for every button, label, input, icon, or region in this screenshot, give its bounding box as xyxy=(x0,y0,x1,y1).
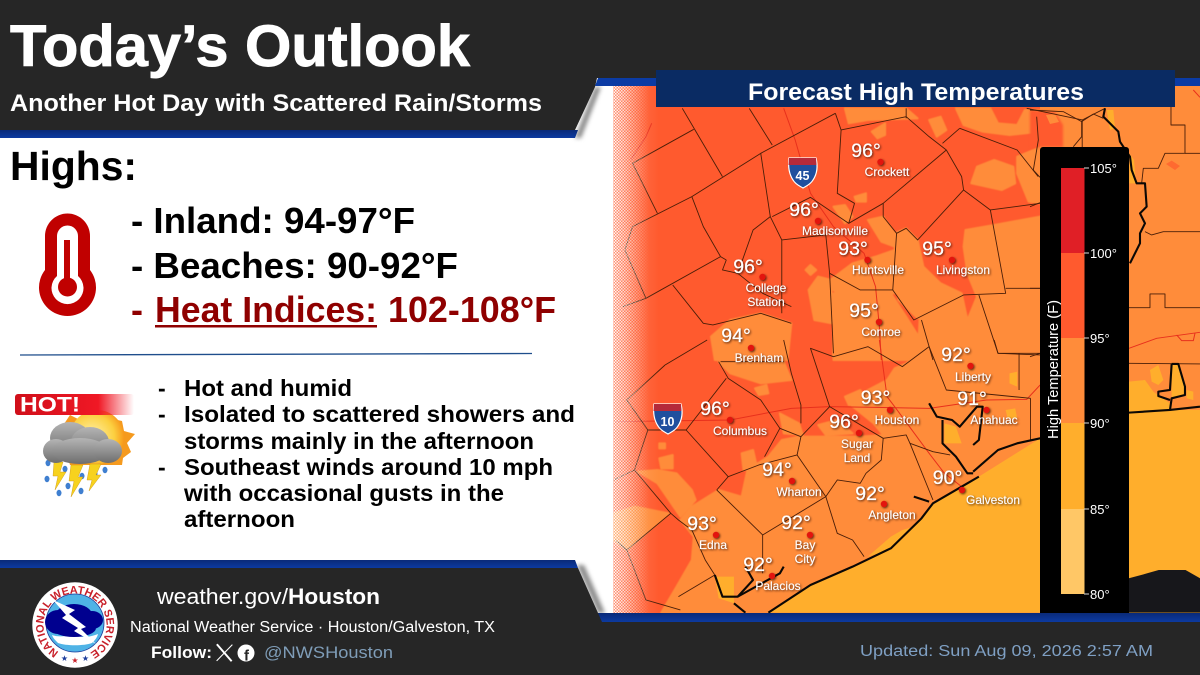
city: Huntsville xyxy=(838,238,904,277)
icon: Facebook: f xyxy=(244,648,250,664)
city: Palacios: 92° xyxy=(743,554,773,576)
footer website link: weather.gov/ xyxy=(156,584,289,609)
city: Sugar Land: 96° xyxy=(829,411,859,433)
bullet: winds: afternoon xyxy=(184,506,295,532)
icon: Facebook xyxy=(238,644,254,664)
legend axis title: High Temperature (F) xyxy=(1045,300,1062,439)
city: College Station: Station xyxy=(747,295,785,309)
city: Anahuac xyxy=(957,388,1018,427)
city: Palacios: Palacios xyxy=(755,579,801,593)
logo lightning bolt xyxy=(53,600,96,644)
city: Liberty: Liberty xyxy=(955,370,991,384)
city: Angleton: Angleton xyxy=(868,508,916,522)
icon: interstate 45 shield xyxy=(788,158,817,188)
city: Crockett: 96° xyxy=(851,140,881,162)
logo blue cloud xyxy=(45,604,103,637)
city: Houston: 93° xyxy=(861,387,890,409)
logo stars xyxy=(61,654,89,665)
logo stars: ★ xyxy=(71,656,79,665)
city: Livingston: 95° xyxy=(922,238,952,260)
icon: interstate 10 shield xyxy=(654,404,682,434)
city: Madisonville: 96° xyxy=(789,199,819,221)
logo sky ring xyxy=(46,594,104,652)
bullet: storms xyxy=(184,401,575,454)
city: Wharton: 94° xyxy=(762,459,792,481)
city: Columbus xyxy=(700,398,767,438)
icon: interstate 45 shield: 45 xyxy=(796,169,809,183)
city: Madisonville: Madisonville xyxy=(802,224,868,238)
map: east side shading xyxy=(1040,86,1200,416)
city: College Station: College xyxy=(746,281,787,295)
city: Madisonville xyxy=(789,199,868,238)
blue accent strip above footer xyxy=(0,560,578,568)
city: Anahuac: 91° xyxy=(957,388,987,410)
dithered map left edge xyxy=(613,86,652,613)
city: Crockett xyxy=(851,140,910,179)
legend labels: 85° xyxy=(1090,502,1110,517)
map: orange patch above legend xyxy=(1046,114,1059,124)
city: Galveston xyxy=(933,467,1020,507)
map: county borders xyxy=(613,107,1200,610)
map: gulf water right of legend xyxy=(1129,410,1200,613)
icon: X xyxy=(217,645,232,660)
heading: highs: Highs: xyxy=(10,143,137,189)
city: Columbus: 96° xyxy=(700,398,730,420)
city: Conroe: 95° xyxy=(849,300,879,322)
bullet dashes: - xyxy=(158,454,166,480)
map title: Forecast High Temperatures xyxy=(748,79,1084,106)
map: gulf water 85-90 degree zone xyxy=(768,438,1040,613)
text block: forecast bullets xyxy=(158,375,575,532)
city: Sugar Land: Land xyxy=(844,451,870,465)
logo lower white cloud band xyxy=(52,634,98,645)
map: 95-100 degree zone above legend xyxy=(1030,110,1063,147)
city: Columbus: Columbus xyxy=(713,424,767,438)
city: Brenham xyxy=(721,325,783,365)
icon: interstate 10 shield: 10 xyxy=(661,415,674,429)
footer website link xyxy=(156,584,380,609)
legend labels: 80° xyxy=(1090,587,1110,602)
city: Conroe: Conroe xyxy=(861,325,901,339)
icon: sun xyxy=(60,410,135,465)
heat indices: Heat Indices: xyxy=(155,289,377,330)
icon: rain drops xyxy=(44,460,108,496)
map: yellow zones near coast xyxy=(715,372,1017,603)
chevron shadows xyxy=(575,87,605,613)
legend labels: 90° xyxy=(1090,416,1110,431)
icon: hot weather with thunderstorm xyxy=(15,394,135,497)
panel: temperature map xyxy=(613,86,1200,613)
icon: National Weather Service logo: NATIONAL WEATHER SERVICE xyxy=(36,586,114,659)
city: Sugar Land xyxy=(829,411,873,465)
icon: lightning bolts xyxy=(53,462,101,497)
heat indices: 102-108°F xyxy=(388,289,556,330)
city: Edna: Edna xyxy=(699,538,727,552)
legend ticks xyxy=(1084,168,1089,594)
icon: hot banner: HOT! xyxy=(20,394,80,416)
bullet: winds xyxy=(183,454,553,532)
icon: thermometer xyxy=(39,214,96,316)
city: Houston xyxy=(861,387,919,427)
subtitle: Another Hot Day with Scattered Rain/Storms xyxy=(10,90,542,117)
blue accent strip under header xyxy=(0,130,578,138)
city: Galveston: Galveston xyxy=(966,493,1020,507)
city: Bay City: Bay xyxy=(795,538,815,552)
bullet: winds: with occasional gusts in the xyxy=(183,480,504,506)
map: 95-100 degree base xyxy=(613,86,1040,613)
logo ring text xyxy=(44,593,106,652)
city forecasts xyxy=(687,140,1020,593)
city: College Station: 96° xyxy=(733,256,763,278)
footer organization: National Weather Service · Houston/Galveston, TX xyxy=(130,619,496,636)
legend labels: 100° xyxy=(1090,246,1117,261)
bullet: storms: storms mainly in the afternoon xyxy=(184,428,534,454)
logo stars: ★ xyxy=(61,654,68,663)
footer follow line: Follow: xyxy=(151,644,212,662)
map: 90-95 degree zones north xyxy=(711,108,1040,360)
icon: cloud xyxy=(43,422,122,464)
city: Sugar Land: Sugar xyxy=(841,437,873,451)
footer follow line xyxy=(151,644,393,664)
blue accent strip below map xyxy=(598,613,1200,622)
map: small red patch right of legend xyxy=(1166,161,1180,170)
bullet dashes xyxy=(158,375,166,480)
updated timestamp: Updated: Sun Aug 09, 2026 2:57 AM xyxy=(860,643,1153,660)
bullet: winds: Southeast winds around 10 mph xyxy=(184,454,553,480)
city: Livingston: Livingston xyxy=(936,263,990,277)
city: Wharton: Wharton xyxy=(776,485,822,499)
inland highs: - Inland: 94-97°F xyxy=(131,200,415,241)
title: Today’s Outlook xyxy=(10,14,470,79)
heat indices: - xyxy=(131,289,143,330)
map: highways xyxy=(615,90,1200,487)
panel: top header bar xyxy=(0,0,1200,130)
city: Angleton: 92° xyxy=(855,483,885,505)
city: Livingston xyxy=(922,238,990,277)
city: Bay City: City xyxy=(795,552,815,566)
legend labels: 105° xyxy=(1090,161,1117,176)
map: 90-95 degree zones south xyxy=(614,337,1040,613)
city: College Station xyxy=(733,256,787,309)
city: Conroe xyxy=(849,300,901,339)
city: Liberty xyxy=(941,344,991,384)
legend labels xyxy=(1090,161,1117,602)
footer website link: Houston xyxy=(288,584,380,609)
city: Huntsville: Huntsville xyxy=(852,263,904,277)
city: Bay City xyxy=(781,512,815,566)
city: Palacios xyxy=(743,554,801,593)
city: Liberty: 92° xyxy=(941,344,971,366)
city: Galveston: 90° xyxy=(933,467,962,489)
logo stars: ★ xyxy=(82,654,89,663)
city: Huntsville: 93° xyxy=(838,238,868,260)
city: Houston: Houston xyxy=(875,413,919,427)
city: Edna xyxy=(687,513,727,552)
bullet dashes: - xyxy=(158,375,166,401)
bullet: storms: Isolated to scattered showers and xyxy=(184,401,575,427)
panel: footer bar xyxy=(0,568,1200,675)
city: Bay City: 92° xyxy=(781,512,811,534)
legend labels: 95° xyxy=(1090,331,1110,346)
social handle: @NWSHouston xyxy=(264,644,393,662)
map: coastline and rivers xyxy=(715,108,1200,613)
panel: map title banner xyxy=(656,70,1175,107)
bullet: hot and humid: Hot and humid xyxy=(184,375,352,401)
beach highs: - Beaches: 90-92°F xyxy=(131,245,458,286)
blue accent strip above map xyxy=(595,78,1200,86)
city: Angleton xyxy=(855,483,916,522)
city: Wharton xyxy=(762,459,822,499)
city: Brenham: Brenham xyxy=(735,351,783,365)
map: yellow zones right of legend xyxy=(1107,110,1193,413)
city: Edna: 93° xyxy=(687,513,717,535)
heat indices xyxy=(131,289,556,330)
map: offshore no-data block xyxy=(1129,570,1200,613)
legend: high temperature color scale xyxy=(1040,147,1129,613)
city: Brenham: 94° xyxy=(721,325,751,347)
legend color bands xyxy=(1061,168,1084,594)
city: Crockett: Crockett xyxy=(865,165,910,179)
bullet dashes: - xyxy=(158,401,166,427)
city: Anahuac: Anahuac xyxy=(970,413,1018,427)
text block: high temperature list xyxy=(131,200,556,330)
